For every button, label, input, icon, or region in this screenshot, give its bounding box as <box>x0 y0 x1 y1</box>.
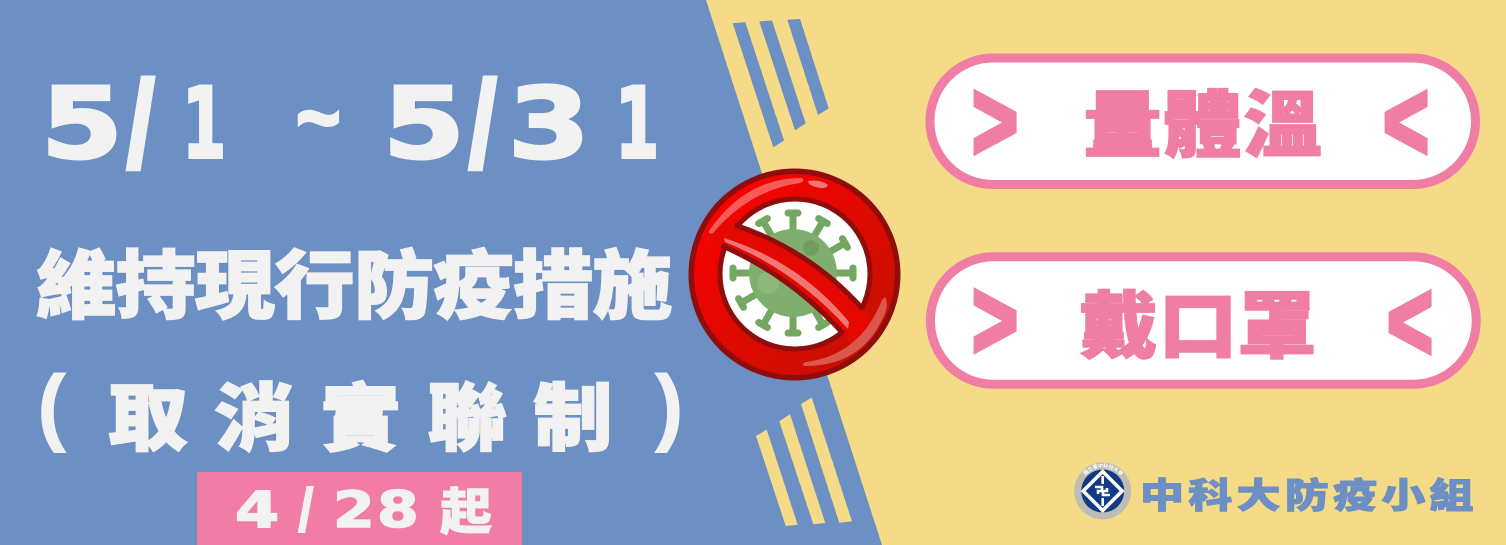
date range heading: / <box>468 56 497 194</box>
icon: no virus sign <box>688 168 900 380</box>
main heading: 維持現行防疫措施 <box>36 246 672 328</box>
pill: take temperature <box>930 58 1476 184</box>
team name: 中科大防疫小組 <box>1140 477 1474 516</box>
prohibition bar <box>708 218 872 345</box>
sub heading <box>38 359 683 460</box>
arrow left: > <box>972 259 1018 382</box>
date range heading: 1 <box>182 67 226 181</box>
date range heading: 5 <box>41 67 123 181</box>
date badge: 4 <box>235 482 279 539</box>
sub heading: ) <box>655 359 683 454</box>
logo: 國立臺中科技大學 <box>1082 463 1124 476</box>
logo <box>1074 462 1132 520</box>
date range heading: 1 <box>615 67 659 181</box>
date badge: 2 <box>333 482 375 540</box>
date badge: 8 <box>377 482 419 540</box>
arrow left: > <box>972 61 1018 183</box>
date range heading: 3 <box>508 67 590 181</box>
arrow right: < <box>1383 61 1429 183</box>
pill: wear mask <box>930 257 1476 384</box>
sub heading: 取消實聯制 <box>108 379 612 460</box>
arrow right: < <box>1387 261 1433 383</box>
glossy highlights <box>709 178 887 366</box>
date range heading: / <box>126 56 155 194</box>
date badge <box>197 472 522 545</box>
sub heading: ( <box>38 359 66 454</box>
label: 量體溫 <box>1084 86 1321 166</box>
label: 戴口罩 <box>1080 287 1316 367</box>
date range heading: ~ <box>296 66 341 167</box>
date badge: 起 <box>440 484 492 540</box>
icon: virus <box>733 213 853 333</box>
date range heading <box>41 56 659 194</box>
background: blue panel <box>0 0 882 545</box>
date range heading: 5 <box>383 67 465 181</box>
decorative blue stripes <box>733 19 829 147</box>
decorative yellow stripes <box>756 398 852 526</box>
date badge: / <box>297 476 315 545</box>
